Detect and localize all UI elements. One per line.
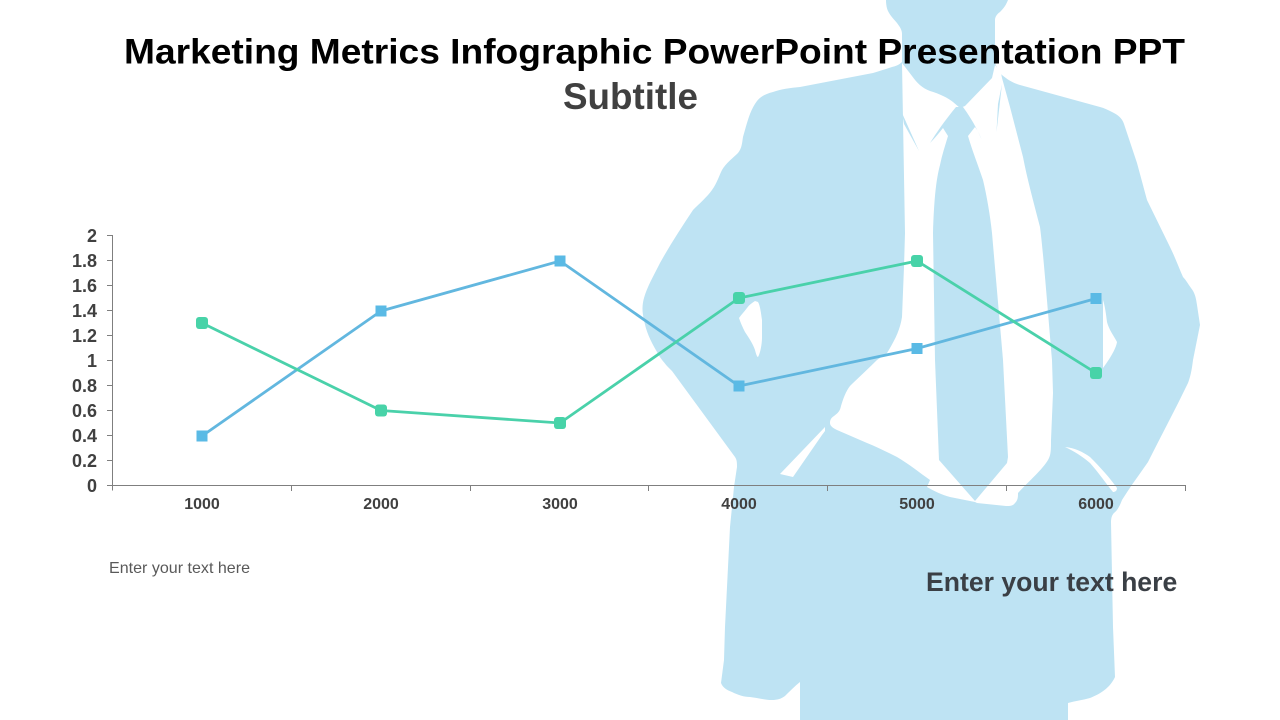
y axis labels: 2	[87, 226, 97, 246]
jacket pocket slit left	[780, 427, 825, 477]
y axis labels: 1.8	[72, 251, 97, 271]
x axis labels: 3000	[542, 496, 578, 513]
subtitle: Subtitle	[563, 76, 698, 117]
callout text: Enter your text here	[926, 567, 1177, 597]
x axis labels: 6000	[1078, 496, 1114, 513]
caption text: Enter your text here	[109, 560, 250, 577]
y axis labels: 0.2	[72, 451, 97, 471]
y axis labels: 0.6	[72, 401, 97, 421]
x axis labels: 5000	[899, 496, 935, 513]
y axis labels: 0	[87, 476, 97, 496]
x axis labels: 4000	[721, 496, 757, 513]
jacket pocket slit right	[1065, 447, 1117, 492]
x axis labels	[184, 496, 1114, 513]
line chart	[72, 226, 1186, 513]
collar crease right	[996, 84, 1002, 132]
y axis labels: 1	[87, 351, 97, 371]
blue data series	[196, 256, 1102, 442]
y axis labels: 1.2	[72, 326, 97, 346]
green data series	[196, 255, 1102, 429]
collar crease left	[902, 113, 919, 151]
x axis labels: 1000	[184, 496, 220, 513]
y axis labels	[72, 226, 97, 496]
white shirt front	[830, 63, 1053, 506]
right arm gap	[1103, 300, 1117, 368]
x axis labels: 2000	[363, 496, 399, 513]
businessman silhouette	[642, 0, 1200, 720]
y axis labels: 1.6	[72, 276, 97, 296]
y axis labels: 1.4	[72, 301, 97, 321]
y axis labels: 0.8	[72, 376, 97, 396]
chart axes	[107, 235, 1186, 491]
title: Marketing Metrics Infographic PowerPoint Presentation PPT	[124, 32, 1185, 72]
left arm gap	[739, 301, 762, 357]
y axis labels: 0.4	[72, 426, 97, 446]
necktie	[930, 107, 1008, 501]
